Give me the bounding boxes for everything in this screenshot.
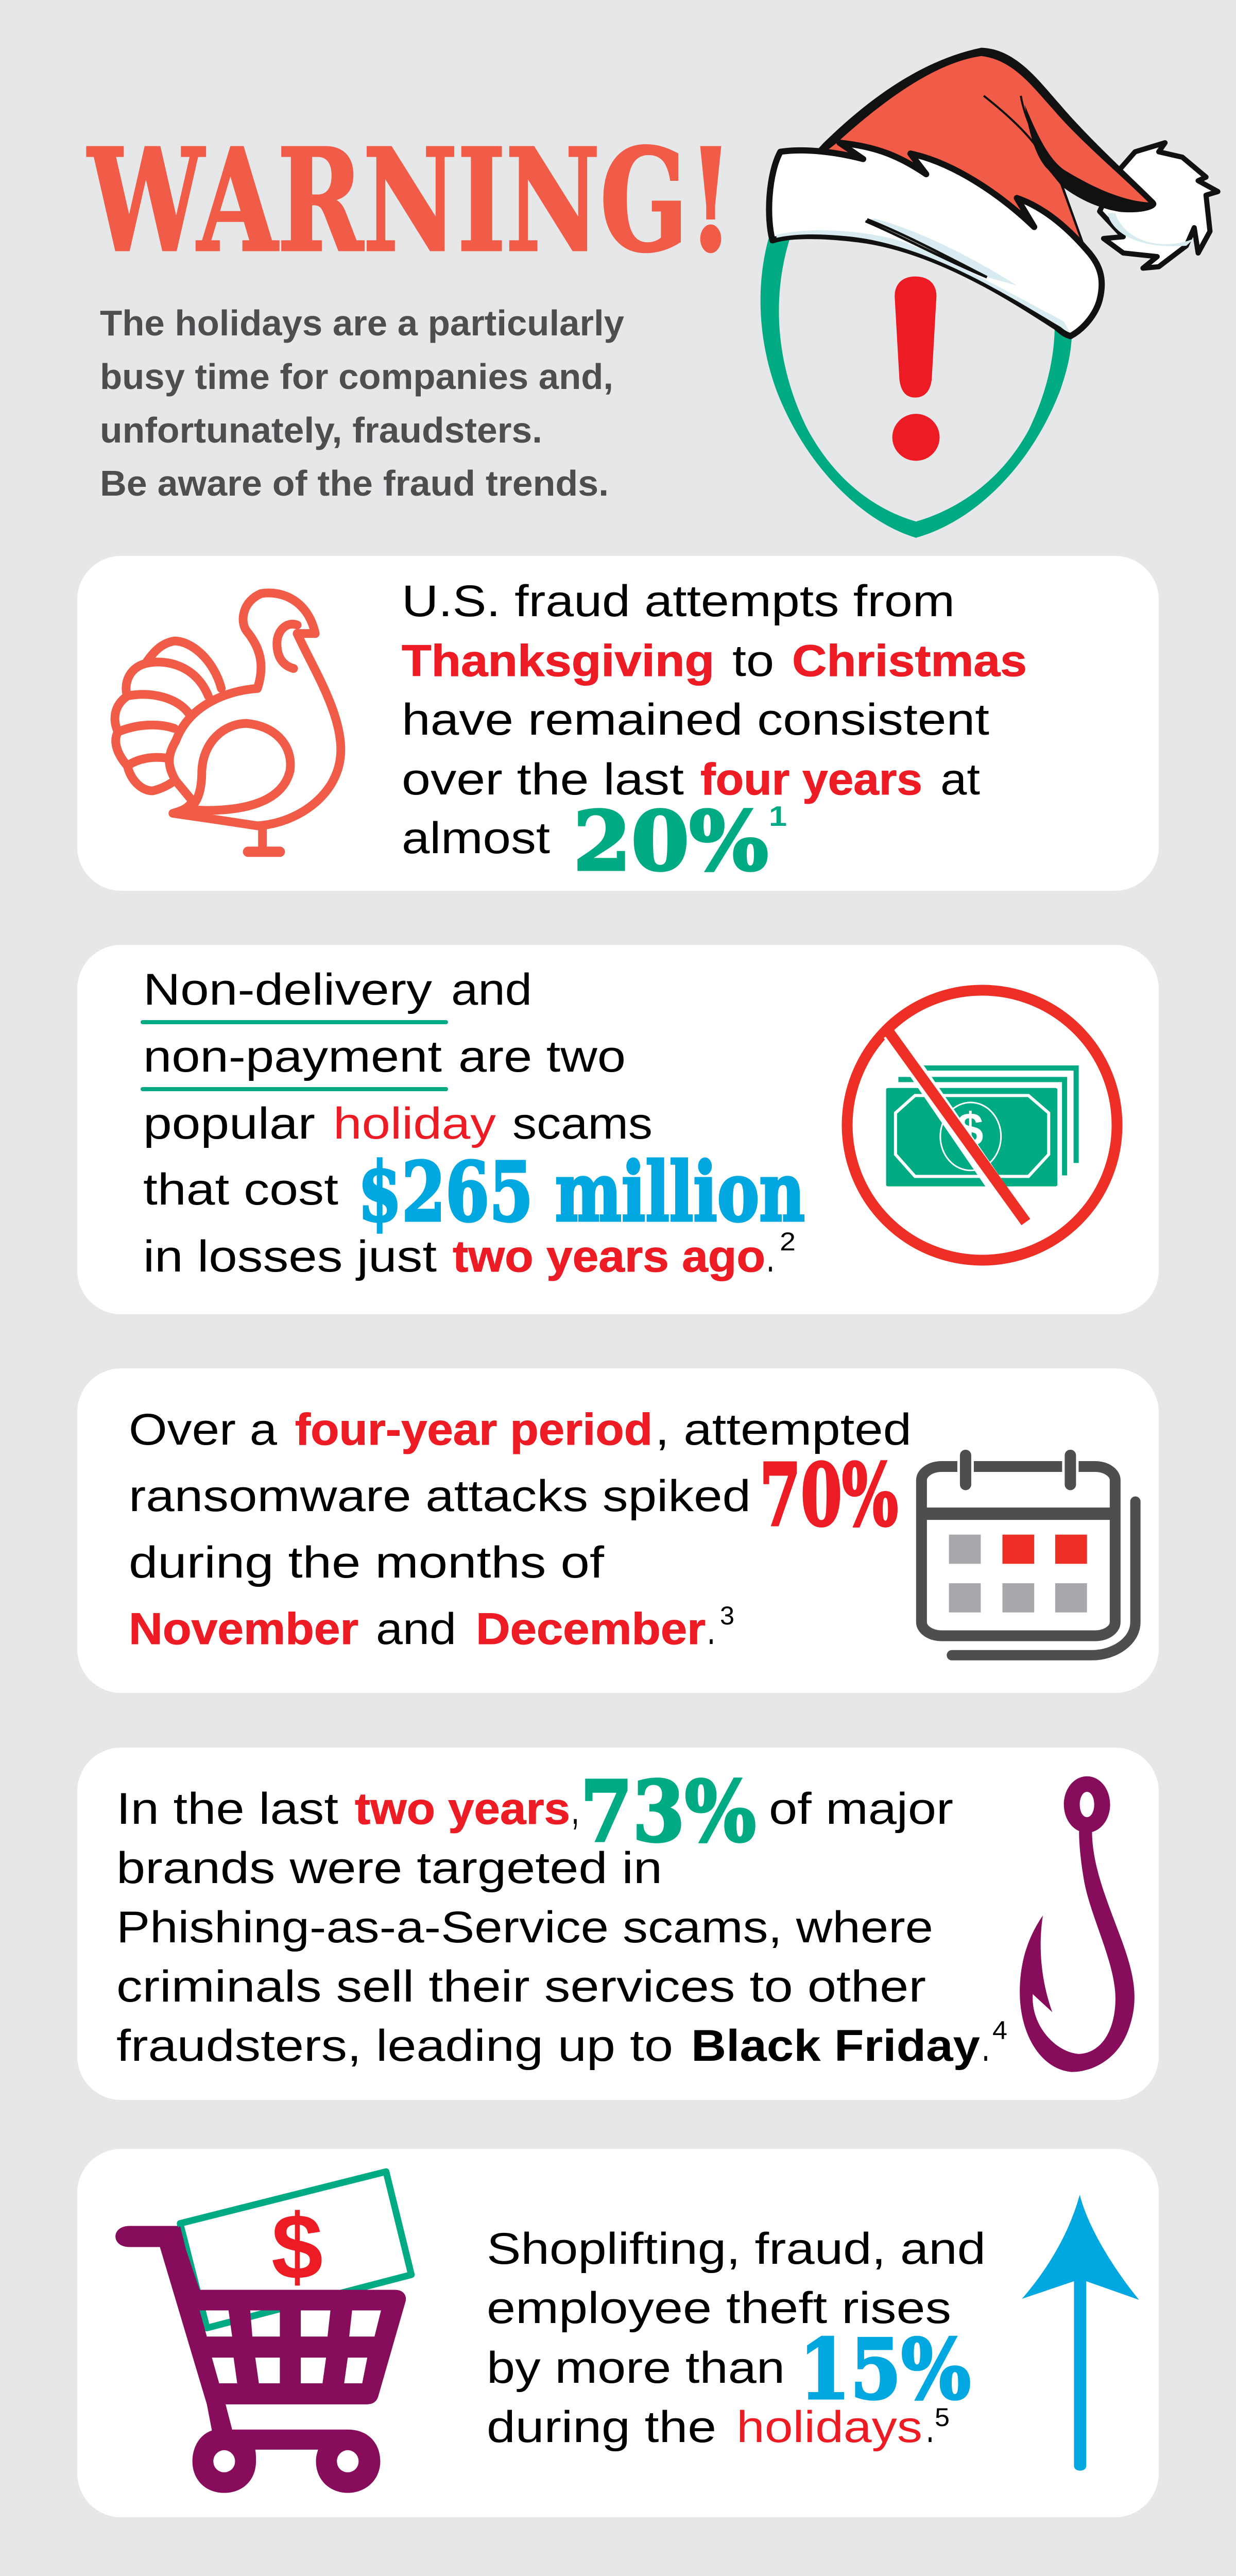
text: fraud attempts statement: over the last <box>402 755 684 804</box>
text: ransomware statement: Over a <box>129 1405 277 1454</box>
icon: shopping cart with bill <box>115 2172 411 2493</box>
text: ransomware statement: and <box>376 1604 456 1654</box>
stat: 15 percent: 15% <box>799 2321 971 2418</box>
intro text: busy time for companies and, <box>100 357 613 397</box>
pompom <box>1100 143 1218 268</box>
panel background <box>77 2149 1159 2517</box>
panel: phishing-as-a-service <box>77 1748 1159 2100</box>
panel background <box>77 556 1159 891</box>
panel: shoplifting and theft <box>77 2149 1159 2517</box>
icon: shopping cart with bill: $ <box>271 2195 323 2299</box>
text: shoplifting statement: employee theft rises <box>487 2283 951 2333</box>
text: non-delivery statement: holiday <box>333 1099 496 1148</box>
text: phishing statement: . <box>982 2021 990 2071</box>
text: ransomware statement <box>129 1405 912 1654</box>
title: WARNING! <box>87 118 733 283</box>
text: phishing statement: Phishing-as-a-Service scams, where <box>116 1903 933 1952</box>
text: non-delivery statement: . <box>766 1232 775 1281</box>
text: non-delivery statement <box>141 965 796 1281</box>
text: fraud attempts statement: U.S. fraud attempts from <box>402 577 955 626</box>
text: fraud attempts statement: to <box>732 636 774 686</box>
intro text <box>100 303 624 503</box>
text: ransomware statement: , attempted <box>655 1405 912 1454</box>
text: ransomware statement: 3 <box>720 1601 734 1630</box>
text: non-delivery statement: Non-delivery <box>143 965 432 1014</box>
text: fraud attempts statement <box>402 577 1027 863</box>
text: phishing statement: criminals sell their services to other <box>116 1962 926 2011</box>
text: non-delivery statement: scams <box>512 1099 653 1148</box>
text: fraud attempts statement: have remained consistent <box>402 695 989 744</box>
text: shoplifting statement: by more than <box>487 2343 785 2393</box>
text: phishing statement: of major <box>769 1784 953 1834</box>
icon: calendar <box>921 1454 1136 1655</box>
panel background <box>77 1748 1159 2100</box>
text: shoplifting statement: Shoplifting, fraud, and <box>487 2224 986 2274</box>
panel: ransomware attacks <box>77 1368 1159 1693</box>
text: phishing statement: two years <box>355 1784 570 1834</box>
exclamation mark <box>892 277 939 461</box>
text: ransomware statement: . <box>707 1604 715 1654</box>
text: phishing statement: 4 <box>992 2016 1007 2045</box>
text: non-delivery statement: popular <box>143 1099 315 1148</box>
panel background <box>77 1368 1159 1693</box>
text: ransomware statement: four-year period <box>295 1405 653 1454</box>
text: non-delivery statement: that cost <box>143 1165 338 1214</box>
text: shoplifting statement: . <box>926 2402 934 2452</box>
icon: crossed out money <box>847 990 1117 1260</box>
panel: non-delivery scams <box>77 945 1159 1314</box>
text: phishing statement: brands were targeted in <box>116 1843 662 1893</box>
icon: turkey <box>115 593 341 852</box>
text: phishing statement: In the last <box>116 1784 338 1834</box>
text: non-delivery statement: and <box>451 965 532 1014</box>
panel background <box>77 945 1159 1314</box>
shield outline <box>761 239 1072 538</box>
icon: fish hook <box>1020 1776 1135 2072</box>
text: phishing statement: , <box>571 1784 579 1834</box>
text: shoplifting statement <box>487 2224 986 2452</box>
text: ransomware statement: November <box>129 1604 358 1654</box>
hat body <box>788 48 1156 249</box>
stat: 70 percent: 70% <box>760 1445 898 1546</box>
stat: 20 percent: 20% <box>573 794 768 889</box>
text: phishing statement <box>116 1784 1007 2071</box>
text: fraud attempts statement: almost <box>402 814 550 863</box>
stat: 20 percent: 1 <box>769 800 787 832</box>
text: non-delivery statement: non-payment <box>143 1032 442 1081</box>
text: shoplifting statement: 5 <box>935 2403 950 2432</box>
icon: crossed out money: $ <box>957 1104 984 1156</box>
stat: $265 million: $265 million <box>358 1145 805 1240</box>
intro text: Be aware of the fraud trends. <box>100 463 609 503</box>
icon: up arrow <box>1022 2195 1139 2470</box>
text: phishing statement: fraudsters, leading up to <box>116 2021 673 2071</box>
intro text: unfortunately, fraudsters. <box>100 410 542 450</box>
text: non-delivery statement: two years ago <box>453 1232 765 1281</box>
intro text: The holidays are a particularly <box>100 303 624 343</box>
text: fraud attempts statement: Christmas <box>792 636 1027 686</box>
text: fraud attempts statement: four years <box>700 755 922 804</box>
text: phishing statement: Black Friday <box>691 2021 980 2071</box>
panel: thanksgiving fraud attempts <box>77 556 1159 891</box>
stat: 73 percent: 73% <box>580 1763 756 1861</box>
hat band <box>769 143 1102 336</box>
text: fraud attempts statement: at <box>940 755 980 804</box>
text: non-delivery statement: in losses just <box>143 1232 437 1281</box>
icon: warning shield wearing santa hat <box>761 48 1218 538</box>
text: ransomware statement: during the months of <box>129 1538 605 1587</box>
text: ransomware statement: ransomware attacks spiked <box>129 1471 751 1521</box>
text: shoplifting statement: holidays <box>736 2402 922 2452</box>
text: fraud attempts statement: Thanksgiving <box>402 636 714 686</box>
text: ransomware statement: December <box>476 1604 706 1654</box>
text: non-delivery statement: are two <box>458 1032 626 1081</box>
text: non-delivery statement: 2 <box>780 1227 796 1256</box>
text: shoplifting statement: during the <box>487 2402 716 2452</box>
